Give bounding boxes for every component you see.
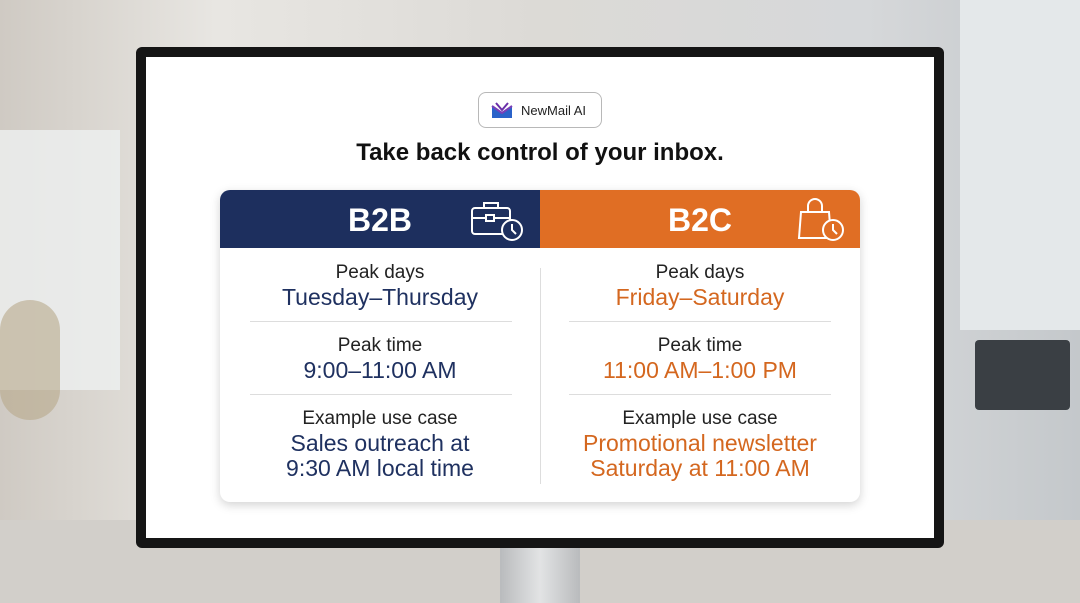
B2B peak days (282, 262, 478, 310)
B2B example: Example use case (302, 408, 458, 429)
header: B2B: B2B (348, 202, 412, 238)
B2C example: Promotional newsletter (583, 430, 817, 456)
B2B peak time: 9:00–11:00 AM (303, 357, 457, 383)
B2B peak time: Peak time (338, 335, 422, 356)
header: B2B (220, 190, 540, 248)
B2C example (583, 408, 817, 481)
logo badge (478, 92, 602, 128)
header: B2C (540, 190, 860, 248)
monitor stand (500, 548, 580, 603)
B2B peak days: Tuesday–Thursday (282, 284, 478, 310)
B2B peak time (303, 335, 457, 383)
icon: bag clock (798, 198, 844, 241)
icon: mail logo (492, 102, 512, 118)
B2C example: Saturday at 11:00 AM (590, 455, 810, 481)
B2B example (286, 408, 474, 481)
logo badge: NewMail AI (521, 102, 586, 118)
header: B2C: B2C (668, 202, 732, 238)
B2B example: Sales outreach at (290, 430, 470, 456)
B2B peak days: Peak days (336, 262, 424, 283)
B2C peak days: Peak days (656, 262, 744, 283)
title: Take back control of your inbox. (356, 139, 724, 166)
icon: briefcase clock (471, 202, 523, 241)
comparison card (220, 190, 860, 502)
B2C peak days (616, 262, 784, 310)
B2C peak time: 11:00 AM–1:00 PM (603, 357, 797, 383)
B2B example: 9:30 AM local time (286, 455, 474, 481)
B2C peak time (603, 335, 797, 383)
B2C peak days: Friday–Saturday (616, 284, 784, 310)
B2C example: Example use case (622, 408, 778, 429)
monitor (136, 47, 944, 548)
B2C peak time: Peak time (658, 335, 742, 356)
